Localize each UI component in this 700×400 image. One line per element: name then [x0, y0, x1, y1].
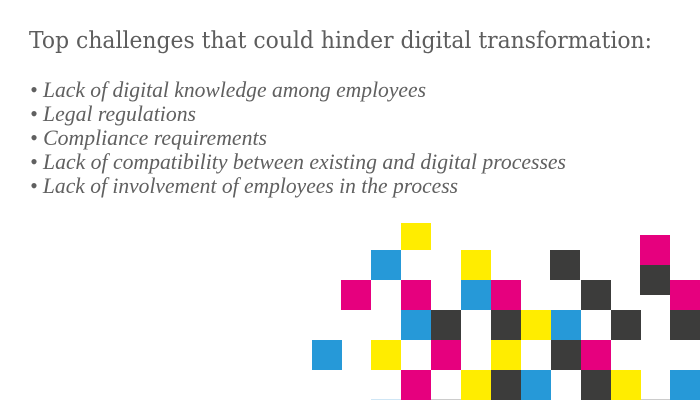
bullet 2: • Legal regulations	[30, 101, 196, 126]
bullet 5: • Lack of involvement of employees in the process	[30, 173, 458, 198]
decorative pixel mosaic	[312, 223, 700, 400]
bullet 3: • Compliance requirements	[30, 125, 267, 150]
bullet 4: • Lack of compatibility between existing and digital processes	[30, 149, 566, 174]
bullet 1: • Lack of digital knowledge among employees	[30, 77, 426, 102]
title: Top challenges that could hinder digital transformation:	[29, 28, 652, 54]
bullet list of challenges	[30, 77, 566, 198]
